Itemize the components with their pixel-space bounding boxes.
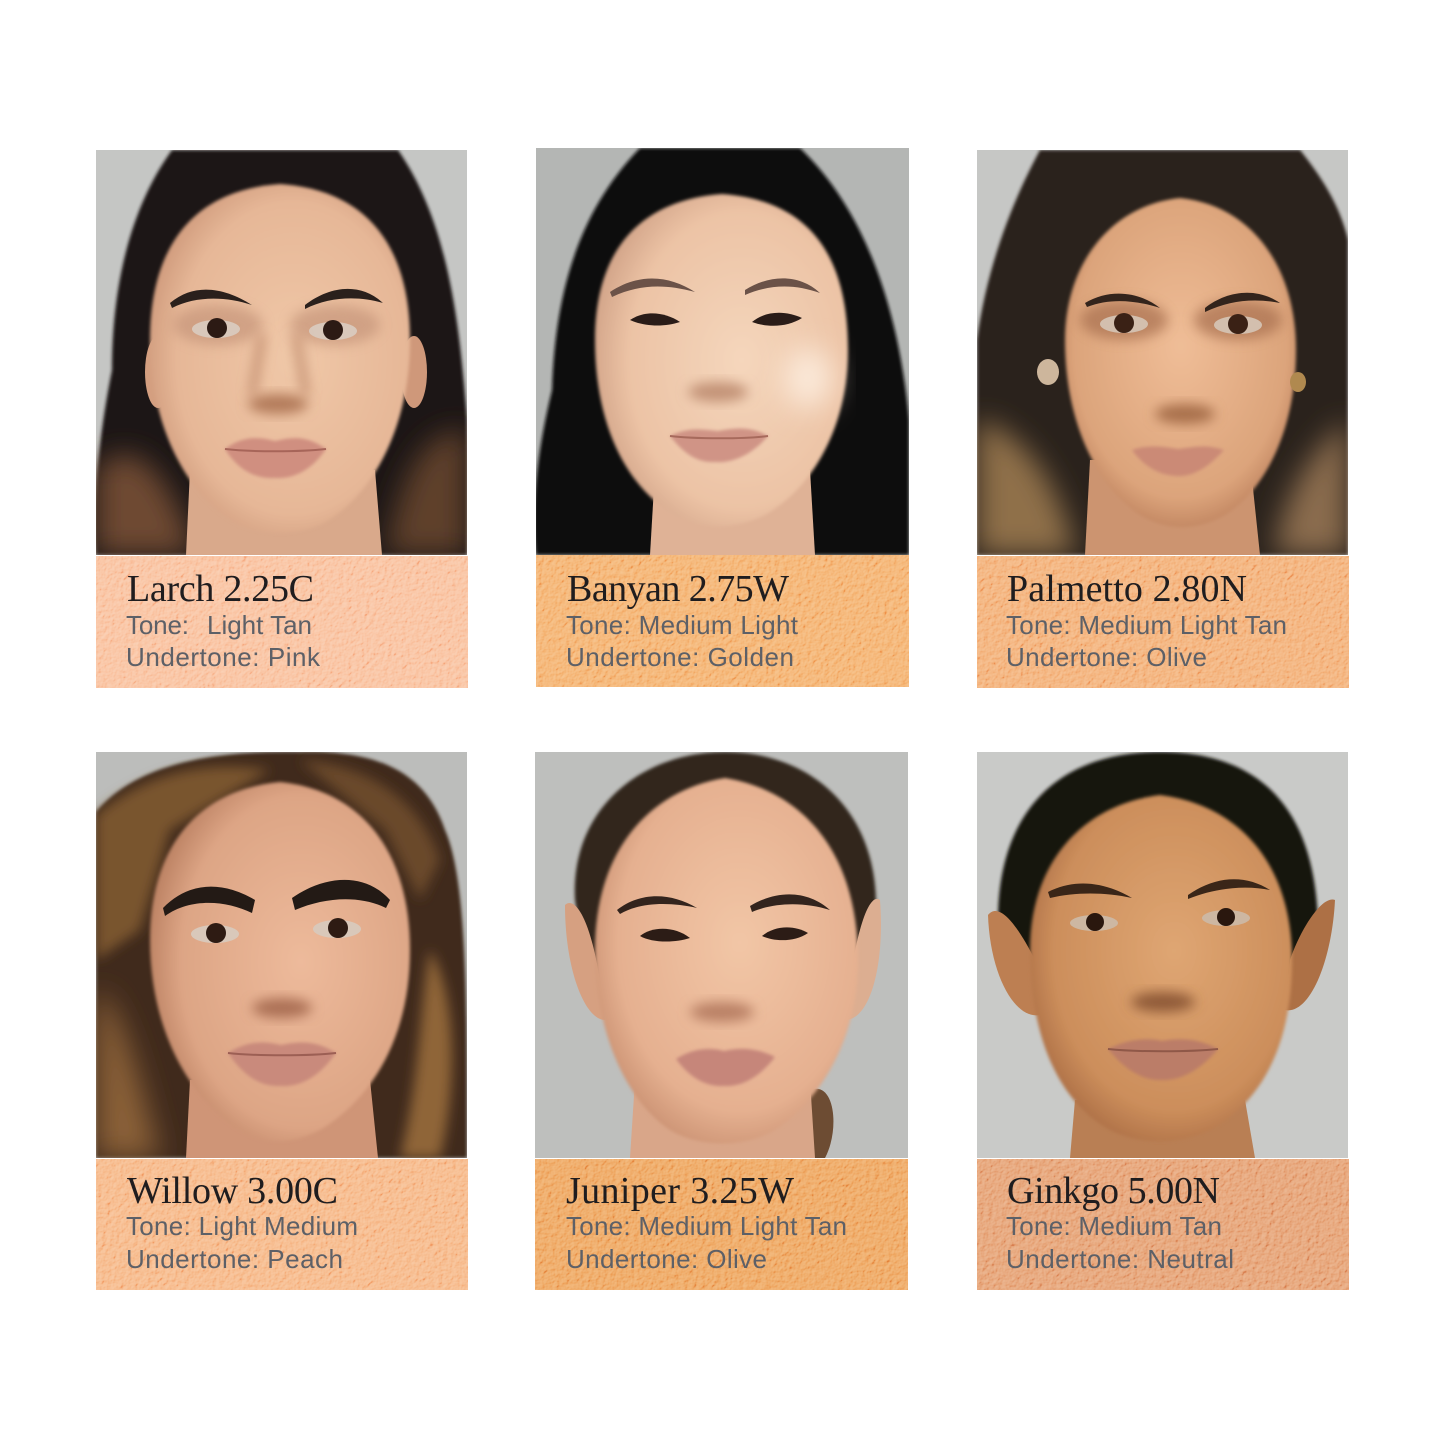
tone: Light Tan (207, 610, 312, 640)
panel: Larch 2.25C (95, 150, 468, 688)
tone: Tone: Medium Tan (1006, 1211, 1222, 1241)
portrait: Willow (96, 752, 467, 1158)
panel: Palmetto 2.80N (977, 150, 1349, 688)
shade name: Juniper 3.25W (566, 1170, 794, 1212)
tone: Tone: Light Medium (126, 1211, 358, 1241)
shade name: Banyan 2.75W (567, 568, 789, 610)
shade name: Ginkgo 5.00N (1007, 1170, 1220, 1212)
panel: Ginkgo 5.00N (977, 752, 1349, 1290)
portrait: Ginkgo (977, 752, 1348, 1158)
panel: Willow 3.00C (96, 752, 468, 1290)
portrait: Larch (95, 150, 467, 555)
tone: Tone: (126, 610, 189, 640)
undertone: Undertone: Peach (126, 1244, 343, 1274)
tone (126, 610, 312, 640)
tone: Tone: Medium Light Tan (1006, 610, 1287, 640)
undertone: Undertone: Golden (566, 642, 794, 672)
undertone: Undertone: Olive (566, 1244, 767, 1274)
panel: Banyan 2.75W (534, 148, 909, 687)
portrait: Juniper (535, 752, 908, 1158)
swatch: Banyan (536, 555, 909, 687)
tone: Tone: Medium Light Tan (566, 1211, 847, 1241)
swatch: Larch (96, 556, 468, 688)
undertone: Undertone: Olive (1006, 642, 1207, 672)
shade name: Willow 3.00C (127, 1170, 338, 1212)
tone: Tone: Medium Light (566, 610, 799, 640)
swatch: Willow (96, 1159, 468, 1290)
undertone: Undertone: Neutral (1006, 1244, 1234, 1274)
swatch: Palmetto (977, 556, 1349, 688)
shade name: Palmetto 2.80N (1007, 568, 1247, 610)
swatch: Ginkgo (977, 1159, 1349, 1290)
panel: Juniper 3.25W (535, 752, 908, 1290)
portrait: Palmetto (977, 150, 1348, 555)
swatch: Juniper (535, 1159, 908, 1290)
undertone: Undertone: Pink (126, 642, 321, 672)
shade name: Larch 2.25C (127, 568, 314, 610)
portrait: Banyan (534, 148, 909, 555)
